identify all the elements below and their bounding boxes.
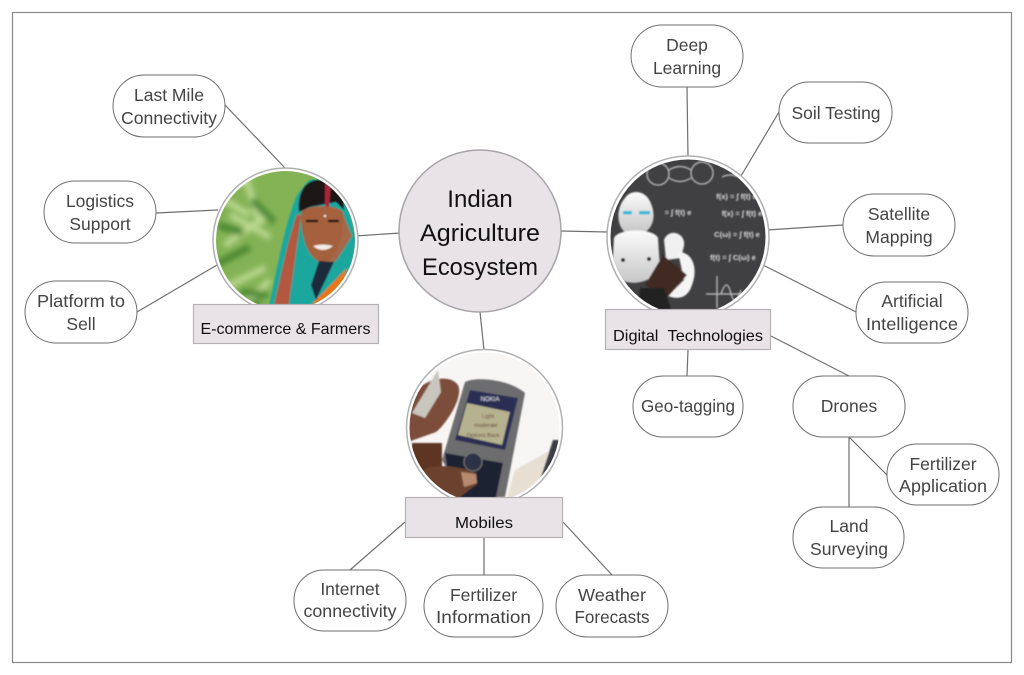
node: Satellite Mapping: Satellite	[868, 204, 930, 224]
chalk formulas: C(ω) = ∫ f(t) e	[714, 230, 760, 239]
hub: Indian Agriculture Ecosystem: Ecosystem	[422, 254, 538, 281]
hub: Indian Agriculture Ecosystem: Agriculture	[420, 220, 540, 247]
node: Platform to Sell: Sell	[66, 314, 96, 334]
label: Mobiles	[406, 498, 562, 538]
node: Land Surveying: Land	[830, 516, 868, 536]
node: Internet connectivity: Internet	[320, 579, 380, 599]
node: Last Mile Connectivity	[113, 75, 225, 137]
node: Logistics Support: Logistics	[66, 191, 134, 211]
node: Deep Learning	[631, 25, 743, 87]
node: Fertilizer Application: Application	[899, 476, 987, 496]
node: Artificial Intelligence: Intelligence	[866, 314, 958, 334]
node: Deep Learning: Deep	[666, 35, 708, 55]
chalk formulas	[647, 162, 762, 308]
label: E-commerce & Farmers: E-commerce & Farmers	[200, 321, 370, 338]
node: Fertilizer Information: Fertilizer	[450, 585, 517, 605]
chalk formulas: = ∫ f(t) e	[665, 208, 691, 217]
node: Land Surveying: Surveying	[810, 539, 888, 559]
node: Logistics Support: Support	[69, 214, 131, 234]
photo: hand holding mobile phone: Light	[482, 414, 494, 420]
node: Satellite Mapping	[843, 194, 955, 256]
photo: hand holding mobile phone	[405, 348, 565, 510]
node: Geo-tagging	[633, 376, 743, 437]
node: Internet connectivity: connectivity	[304, 601, 397, 621]
node: Drones	[793, 376, 905, 437]
robot	[612, 192, 695, 312]
hub: Indian Agriculture Ecosystem	[399, 150, 561, 312]
node: Drones: Drones	[821, 396, 877, 416]
label: Mobiles: Mobiles	[455, 515, 513, 532]
photo: woman farmer	[212, 167, 359, 304]
node: Internet connectivity	[294, 570, 406, 631]
chalk formulas: f(x) = ∫ f(t) dt	[716, 192, 760, 201]
node: Logistics Support	[44, 181, 156, 243]
node: Artificial Intelligence: Artificial	[881, 291, 943, 311]
node: Platform to Sell	[25, 281, 137, 343]
node: Fertilizer Information	[424, 575, 543, 637]
node: Weather Forecasts: Forecasts	[574, 607, 650, 627]
face	[301, 206, 343, 263]
photo: hand holding mobile phone: Options Back	[467, 433, 500, 439]
hub: Indian Agriculture Ecosystem: Indian	[447, 186, 513, 213]
node: Weather Forecasts: Weather	[578, 585, 646, 605]
connector lines	[137, 87, 887, 575]
chalk formulas: f(t) = ∫ C(ω) e	[710, 253, 756, 262]
node: Weather Forecasts	[556, 575, 668, 637]
hair	[299, 180, 344, 212]
photo: hand holding mobile phone: moderate	[474, 423, 498, 429]
photo: robot and chalkboard	[605, 155, 770, 320]
node: Soil Testing: Soil Testing	[792, 103, 880, 123]
label: Digital Technologies: Digital Technologies	[613, 328, 763, 345]
photo: hand holding mobile phone: NOKIA	[481, 397, 499, 403]
node: Satellite Mapping: Mapping	[865, 227, 933, 247]
label: E-commerce & Farmers	[194, 304, 378, 344]
node: Artificial Intelligence	[856, 282, 968, 343]
node: Fertilizer Application	[887, 444, 999, 505]
sari	[268, 178, 356, 315]
node: Platform to Sell: Platform to	[37, 291, 125, 311]
node: Fertilizer Information: Information	[436, 607, 531, 627]
label: Digital Technologies	[606, 310, 770, 350]
chalk formulas: f(x) = ∫ f(t) e	[722, 209, 762, 218]
node: Last Mile Connectivity: Connectivity	[121, 108, 217, 128]
node: Soil Testing	[779, 82, 892, 143]
node: Land Surveying	[793, 507, 904, 568]
node: Fertilizer Application: Fertilizer	[909, 454, 977, 474]
node: Geo-tagging: Geo-tagging	[641, 396, 735, 416]
node: Deep Learning: Learning	[653, 58, 721, 78]
node: Last Mile Connectivity: Last Mile	[134, 85, 204, 105]
